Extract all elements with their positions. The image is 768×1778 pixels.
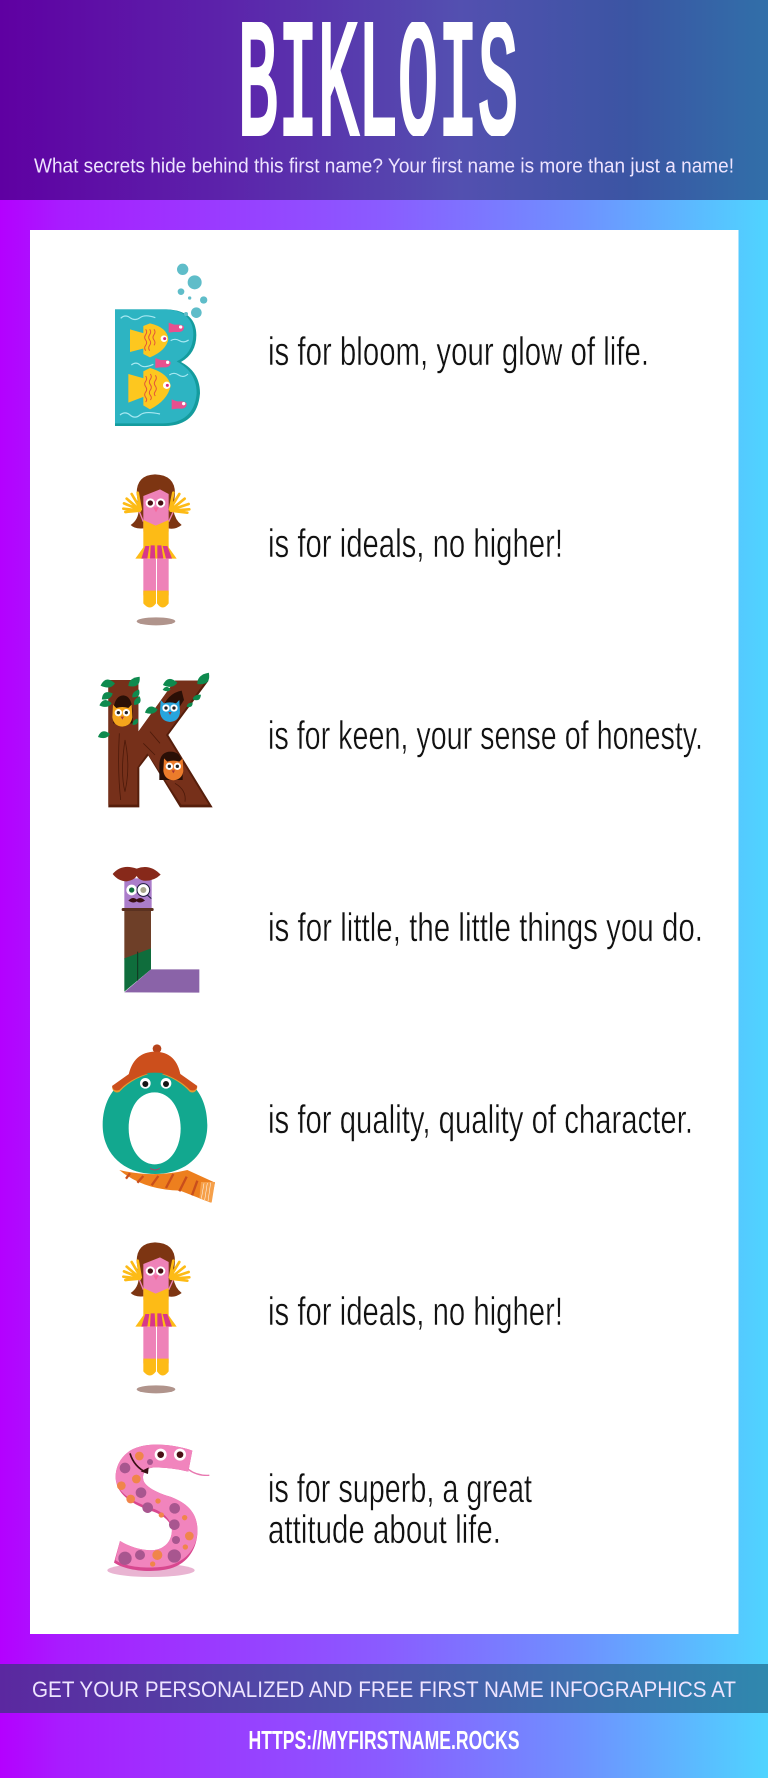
panel: white letters card [30, 230, 738, 1634]
icon: letter S snake [107, 1445, 209, 1577]
text: S lines [268, 1467, 532, 1552]
header banner [0, 0, 768, 200]
icon: letter B with fish [115, 264, 207, 426]
subtitle: What secrets hide behind this first name? Your first name is more than just a name! [34, 156, 734, 178]
icon: letter L gentleman [113, 867, 199, 993]
icon: letter I girl cheerleader [123, 474, 189, 625]
footer band [0, 1664, 768, 1713]
text: I line: is for ideals, no higher! [268, 522, 563, 566]
text: second I line: is for ideals, no higher! [268, 1290, 563, 1334]
icon: letter K tree with owls [98, 672, 213, 807]
icon: letter Q in hat and scarf [103, 1044, 215, 1203]
text: S lines: attitude about life. [268, 1508, 501, 1552]
text: S lines: is for superb, a great [268, 1467, 532, 1511]
footer url: HTTPS://MYFIRSTNAME.ROCKS [248, 1725, 520, 1755]
title: BIKLQIS [238, 0, 518, 183]
icon: second letter I girl cheerleader [123, 1242, 189, 1393]
